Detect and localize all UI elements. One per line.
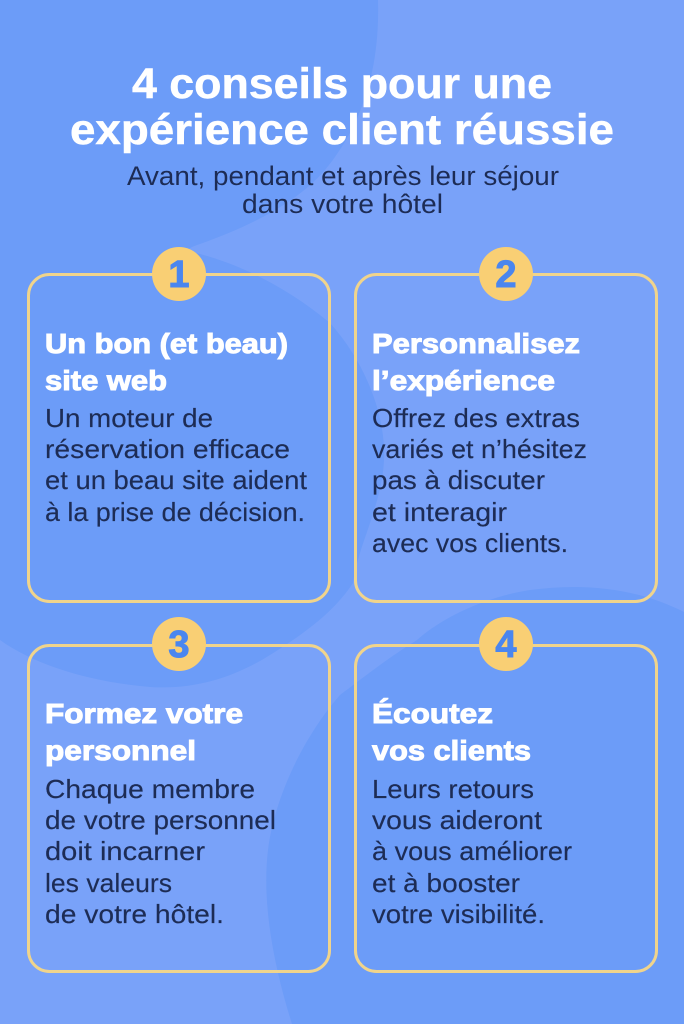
- heading: card 4: Écoutez: [372, 698, 493, 729]
- heading: card 2: Personnalisez: [372, 328, 580, 359]
- badge 2: 2: [495, 254, 517, 296]
- text: card 2: Offrez des extras: [372, 403, 580, 433]
- text: card 1: [45, 403, 308, 527]
- text: card 3: de votre hôtel.: [45, 899, 224, 929]
- text: card 2: et interagir: [372, 497, 507, 527]
- text: card 1: et un beau site aident: [45, 465, 308, 495]
- heading: card 3: [45, 698, 243, 766]
- text: card 2: variés et n’hésitez: [372, 434, 587, 464]
- text: card 4: Leurs retours: [372, 774, 534, 804]
- heading: card 1: [45, 328, 288, 396]
- text: card 4: et à booster: [372, 868, 520, 898]
- text: card 1: à la prise de décision.: [45, 497, 305, 527]
- badge 2: [479, 247, 533, 301]
- title: 4 conseils pour une: [132, 60, 552, 108]
- text: card 2: avec vos clients.: [372, 528, 568, 558]
- text: card 4: à vous améliorer: [372, 836, 572, 866]
- subtitle: [127, 161, 559, 219]
- heading: card 3: personnel: [45, 735, 196, 766]
- panel: card 2: [356, 247, 656, 602]
- heading: card 1: site web: [45, 365, 167, 396]
- text: card 3: doit incarner: [45, 836, 205, 866]
- title: [70, 60, 614, 154]
- badge 4: [479, 617, 533, 671]
- heading: card 4: vos clients: [372, 735, 531, 766]
- subtitle: dans votre hôtel: [242, 189, 443, 219]
- heading: card 1: Un bon (et beau): [45, 328, 288, 359]
- text: card 3: [45, 774, 276, 929]
- heading: card 4: [372, 698, 531, 766]
- panel: card 1: [28, 247, 330, 602]
- badge 1: 1: [168, 254, 190, 296]
- subtitle: Avant, pendant et après leur séjour: [127, 161, 559, 191]
- text: card 1: Un moteur de: [45, 403, 213, 433]
- text: card 4: votre visibilité.: [372, 899, 545, 929]
- text: card 2: pas à discuter: [372, 465, 545, 495]
- badge 1: [152, 247, 206, 301]
- badge 4: 4: [495, 624, 517, 666]
- heading: card 2: [372, 328, 580, 396]
- text: card 4: vous aideront: [372, 805, 543, 835]
- text: card 2: [372, 403, 587, 558]
- title: expérience client réussie: [70, 106, 614, 154]
- text: card 4: [372, 774, 572, 929]
- heading: card 3: Formez votre: [45, 698, 243, 729]
- heading: card 2: l’expérience: [372, 365, 555, 396]
- badge 3: [152, 617, 206, 671]
- text: card 3: les valeurs: [45, 868, 172, 898]
- text: card 3: Chaque membre: [45, 774, 255, 804]
- badge 3: 3: [168, 624, 190, 666]
- text: card 1: réservation efficace: [45, 434, 290, 464]
- panel: card 4: [356, 617, 656, 972]
- panel: card 3: [28, 617, 330, 972]
- text: card 3: de votre personnel: [45, 805, 276, 835]
